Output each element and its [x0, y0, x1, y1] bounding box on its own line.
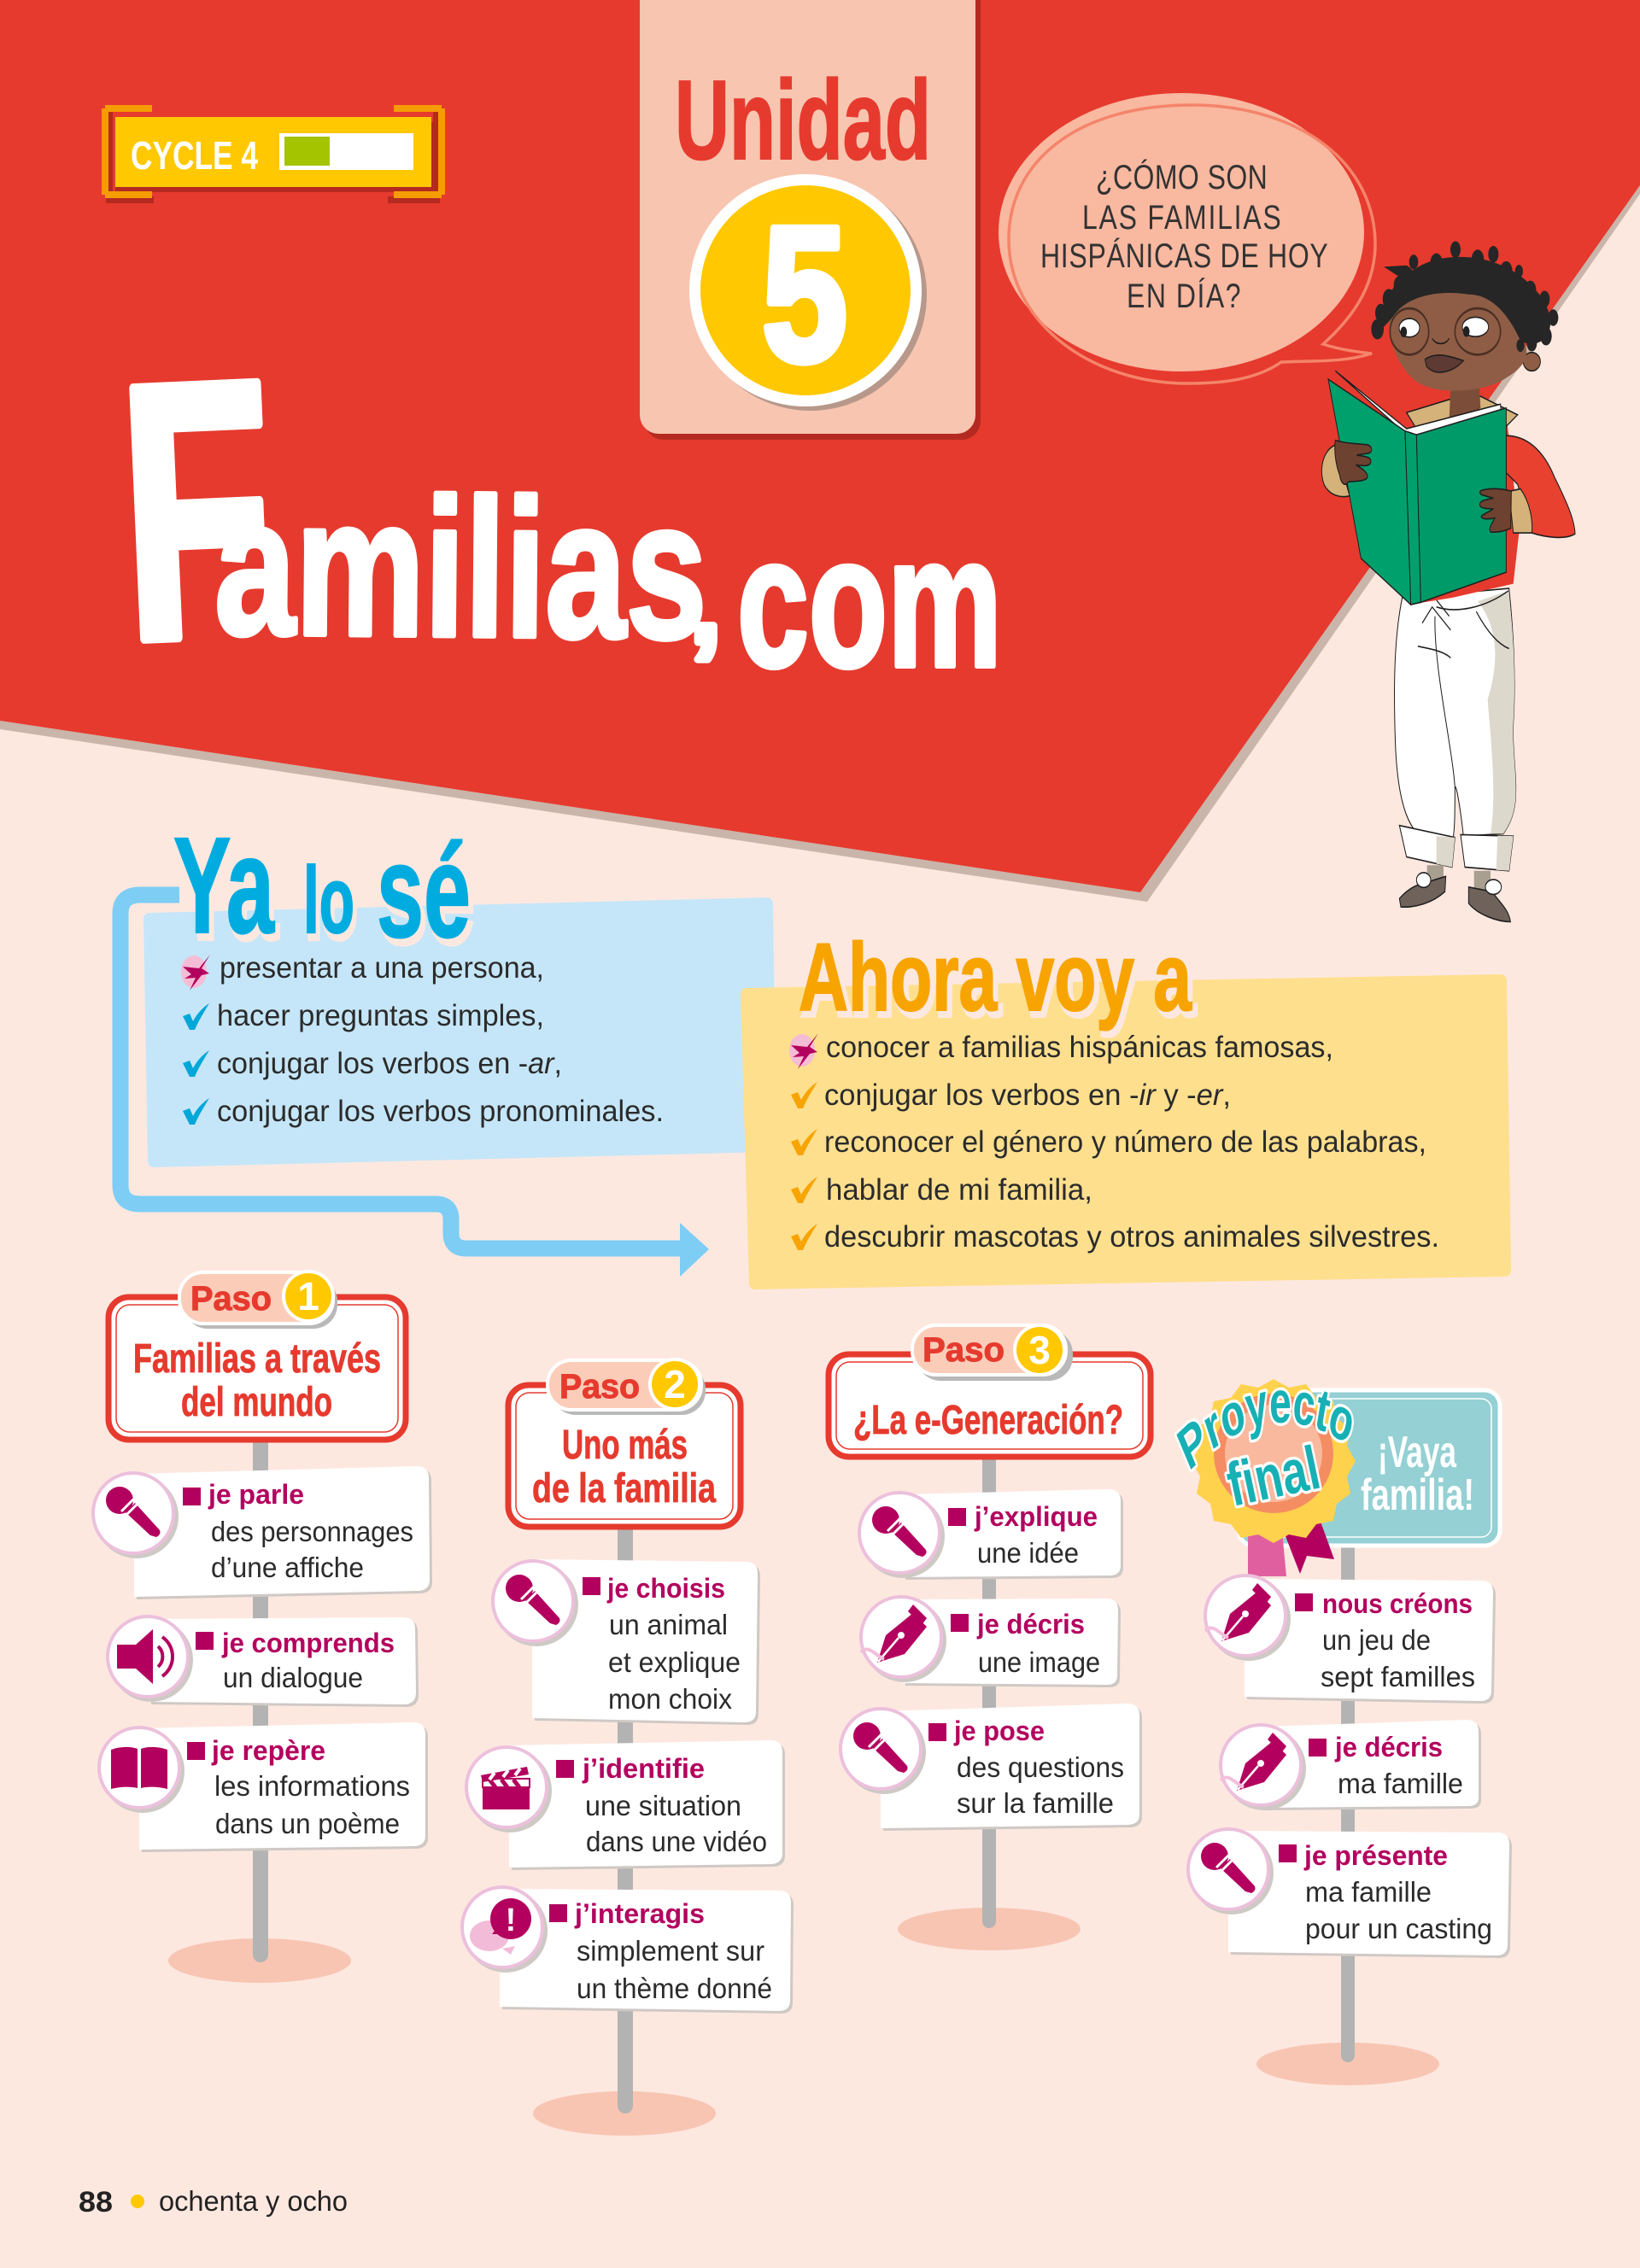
- proyecto final label: final: [1221, 1434, 1326, 1520]
- item: je choisis: un animal: [609, 1609, 728, 1640]
- item: j'identifie: j’identifie: [582, 1753, 705, 1784]
- hand holding book, left: [1335, 441, 1372, 484]
- sign: paso 3 title: [829, 1324, 1151, 1457]
- heading: ya lo se: lo: [303, 848, 354, 953]
- item: je repere: dans un poème: [215, 1808, 400, 1839]
- list: ya lo se: presentar a una persona,: [220, 951, 544, 985]
- item: j'interagis: j’interagis: [574, 1898, 705, 1929]
- item: j'interagis: !: [506, 1903, 516, 1938]
- item: j'interagis: [462, 1887, 791, 2011]
- rosette badge: [1174, 1379, 1356, 1576]
- open green book: [1328, 371, 1506, 605]
- red header banner shadow: [0, 185, 1640, 902]
- item: j'explique: [859, 1489, 1121, 1577]
- item: je repere: [99, 1722, 425, 1850]
- list: ya lo se: [181, 951, 664, 1128]
- item: nous creons: [1205, 1575, 1493, 1701]
- item: j'interagis: simplement sur: [577, 1935, 764, 1967]
- panel: ya lo se: [149, 809, 770, 1161]
- heading: ahora voy a: Ahora voy a: [802, 928, 1196, 1035]
- neck: [1450, 385, 1480, 424]
- panel: paso 1 signpost: [93, 1270, 430, 1983]
- item: je choisis: mon choix: [608, 1683, 732, 1715]
- list: ahora voy a: [789, 1031, 1439, 1254]
- item: je decris ma famille: ma famille: [1338, 1768, 1463, 1799]
- main title: F: [113, 304, 281, 717]
- item: j'interagis: un thème donné: [577, 1973, 772, 2004]
- item: je presente: je présente: [1303, 1840, 1448, 1871]
- unit number badge: [689, 174, 927, 411]
- sign: paso 1 title: Familias a través: [133, 1336, 381, 1382]
- heading: ya lo se: lo: [306, 853, 357, 958]
- socks and shoes: [1399, 865, 1510, 921]
- sign: paso 3 title: Paso: [922, 1331, 1004, 1369]
- item: je pose: des questions: [957, 1751, 1124, 1783]
- unit label: Unidad: [675, 57, 931, 183]
- speech bubble text: LAS FAMILIAS: [1082, 198, 1281, 237]
- sign: vaya familia: [1239, 1390, 1500, 1546]
- speech bubble text: [1040, 158, 1328, 315]
- item: je pose: je pose: [953, 1716, 1045, 1746]
- character reading a book: [1321, 242, 1575, 921]
- item: j'identifie: une situation: [585, 1790, 741, 1821]
- sweater: [1321, 396, 1575, 605]
- speech bubble text: ¿CÓMO SON: [1096, 158, 1268, 196]
- item: je presente: [1188, 1829, 1509, 1955]
- sign: paso 2 title: 2: [664, 1362, 686, 1406]
- sign: paso 2 title: Paso: [559, 1368, 640, 1406]
- heading: ya lo se: sé: [380, 822, 474, 970]
- sign: paso 2 title: [508, 1358, 741, 1527]
- main title: ,: [690, 541, 721, 666]
- item: je parle: des personnages: [211, 1516, 413, 1547]
- sign: vaya familia: familia!: [1361, 1470, 1474, 1520]
- list: ahora voy a: conocer a familias hispánicas famosas,: [826, 1031, 1333, 1064]
- list: ya lo se: hacer preguntas simples,: [217, 999, 544, 1032]
- sign: paso 1 title: del mundo: [181, 1380, 332, 1425]
- list: ya lo se: conjugar los verbos pronominales.: [217, 1095, 664, 1128]
- footer page number: 88: [79, 2186, 113, 2218]
- sign: paso 1 title: [108, 1270, 406, 1440]
- item: je pose: sur la famille: [957, 1787, 1114, 1819]
- panel: paso 3 signpost: [829, 1324, 1151, 1950]
- main title: amilias: [214, 456, 708, 680]
- item: je repere: les informations: [214, 1770, 410, 1802]
- hair: [1371, 242, 1558, 352]
- sign: paso 2 title: Uno más: [562, 1423, 688, 1468]
- panel: proyecto final signpost: [1174, 1379, 1512, 2085]
- footer page number: [79, 2185, 348, 2218]
- sign: paso 1 title: Paso: [190, 1280, 272, 1318]
- sign: paso 3 title: 3: [1028, 1328, 1051, 1372]
- trousers: [1395, 588, 1516, 843]
- panel: paso 2 signpost: [462, 1358, 791, 2136]
- speech bubble text: EN DÍA?: [1127, 277, 1241, 315]
- item: je parle: [93, 1466, 430, 1597]
- heading: ya lo se: Ya: [173, 809, 275, 962]
- item: j'identifie: [466, 1740, 782, 1868]
- trouser cuffs: [1399, 826, 1514, 871]
- item: je comprends: un dialogue: [223, 1662, 363, 1693]
- item: j'identifie: dans une vidéo: [586, 1826, 767, 1857]
- item: nous creons: sept familles: [1321, 1661, 1475, 1692]
- head: [1389, 289, 1540, 391]
- item: je decris ma famille: je décris: [1334, 1732, 1443, 1762]
- sign: vaya familia: ¡Vaya: [1378, 1428, 1457, 1477]
- item: je pose: [840, 1704, 1139, 1828]
- cycle label: CYCLE 4: [131, 133, 258, 178]
- heading: ya lo se: Ya: [177, 814, 278, 967]
- list: ahora voy a: hablar de mi familia,: [826, 1173, 1092, 1207]
- proyecto final label: Proyecto: [1174, 1387, 1354, 1472]
- item: je decris: [861, 1597, 1118, 1685]
- flow arrow: [120, 895, 709, 1277]
- item: je decris: une image: [978, 1646, 1100, 1678]
- sign: paso 1 title: 1: [297, 1274, 319, 1318]
- proyecto final label: [1174, 1387, 1354, 1520]
- speech bubble: [999, 93, 1375, 383]
- unit tab: [640, 0, 981, 440]
- main title: com: [737, 499, 1002, 706]
- item: je parle: je parle: [208, 1479, 304, 1510]
- item: nous creons: un jeu de: [1322, 1624, 1431, 1656]
- heading: ya lo se: [173, 809, 474, 970]
- progress bar: [279, 133, 413, 170]
- panel: ahora voy a: [747, 924, 1505, 1283]
- main title: [113, 304, 1002, 717]
- heading: ya lo se: sé: [377, 817, 471, 965]
- list: ya lo se: conjugar los verbos en -ar,: [217, 1047, 562, 1080]
- item: je decris ma famille: [1221, 1720, 1479, 1808]
- unit number badge: 5: [762, 186, 847, 401]
- item: j'explique: une idée: [977, 1537, 1079, 1569]
- item: je choisis: [493, 1559, 758, 1722]
- sign: paso 3 title: ¿La e-Generación?: [853, 1398, 1123, 1443]
- cycle badge: [105, 108, 442, 200]
- item: je parle: d’une affiche: [211, 1552, 364, 1583]
- list: ahora voy a: conjugar los verbos en -ir y -er,: [824, 1078, 1231, 1112]
- sign: paso 2 title: de la familia: [532, 1466, 716, 1511]
- red header banner: [0, 0, 1640, 892]
- item: je decris: je décris: [976, 1609, 1085, 1640]
- item: j'explique: j’explique: [974, 1501, 1098, 1532]
- item: je choisis: je choisis: [606, 1573, 725, 1604]
- item: je comprends: je comprends: [221, 1628, 395, 1658]
- item: je repere: je repère: [211, 1735, 325, 1766]
- item: je presente: ma famille: [1305, 1876, 1432, 1908]
- item: je choisis: et explique: [608, 1646, 741, 1678]
- item: je comprends: [108, 1616, 416, 1704]
- list: ahora voy a: descubrir mascotas y otros animales silvestres.: [824, 1220, 1439, 1254]
- list: ahora voy a: reconocer el género y número de las palabras,: [824, 1125, 1426, 1159]
- item: nous creons: nous créons: [1322, 1588, 1473, 1619]
- heading: ahora voy a: Ahora voy a: [799, 924, 1192, 1031]
- item: je presente: pour un casting: [1305, 1913, 1492, 1944]
- speech bubble text: HISPÁNICAS DE HOY: [1040, 237, 1328, 275]
- hand holding book, right: [1479, 488, 1511, 532]
- footer page number: ochenta y ocho: [159, 2185, 348, 2217]
